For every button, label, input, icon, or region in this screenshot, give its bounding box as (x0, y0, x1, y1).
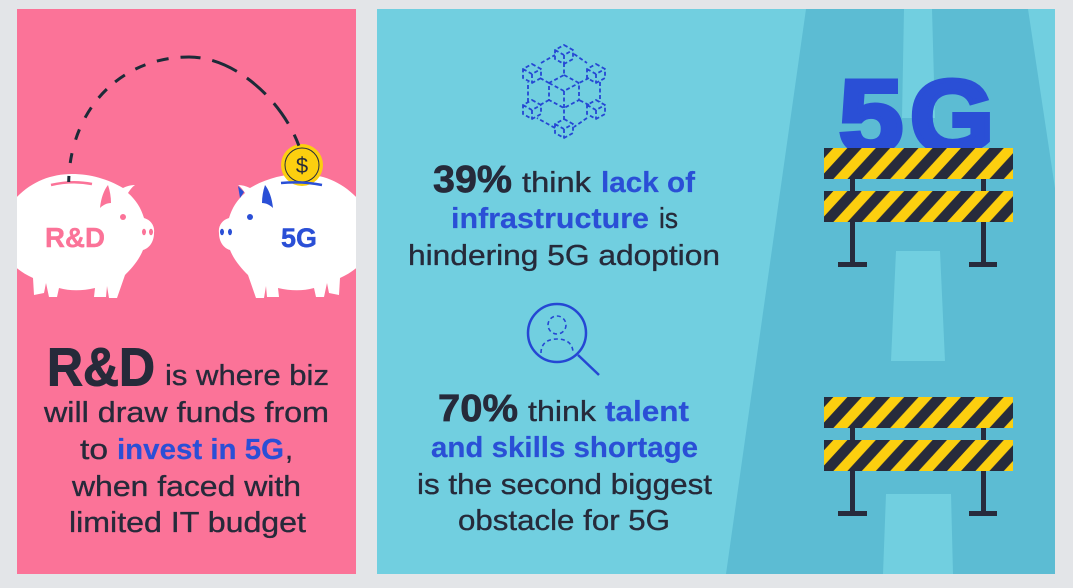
text block: talent statistic: obstacle for 5G (458, 505, 670, 537)
text block: talent statistic: talent (605, 396, 689, 428)
arrow: dashed coin path between piggy banks (69, 57, 299, 182)
text block: R&D statement: invest in 5G (117, 434, 284, 466)
icon: bottom road barrier (824, 397, 1013, 516)
text block: R&D statement: is where biz (165, 360, 329, 392)
text block: R&D statement: will draw funds from (43, 397, 329, 429)
text block: talent statistic: think (528, 396, 597, 428)
text block: R&D statement: to (80, 434, 108, 466)
icon: top road barrier (824, 148, 1013, 267)
icon: gold coin (281, 144, 323, 186)
heading: large 5G: G (910, 59, 994, 174)
text block: R&D statement: limited IT budget (69, 507, 306, 539)
text block: infrastructure statistic: hindering 5G adoption (408, 240, 720, 272)
icon: R&D piggy bank (10, 174, 154, 298)
text block: infrastructure statistic: is (659, 203, 678, 235)
text block: R&D statement: R&D (47, 338, 155, 398)
text block: talent statistic: and skills shortage (431, 432, 698, 464)
icon: gold coin: $ (296, 153, 308, 178)
icon: R&D piggy bank: R&D (45, 222, 105, 253)
icon: magnifier over person (528, 304, 599, 375)
text block: R&D statement (43, 338, 329, 539)
text block: talent statistic: is the second biggest (417, 469, 712, 501)
panel: 5G obstacles (377, 9, 1056, 574)
heading: large 5G (839, 78, 990, 148)
text block: infrastructure statistic: lack of (601, 167, 695, 199)
panel: R&D funding (10, 9, 363, 574)
text block: infrastructure statistic: infrastructure (451, 203, 649, 235)
text block: R&D statement: , (285, 434, 293, 466)
icon: 5G piggy bank (219, 144, 363, 298)
text block: infrastructure statistic: think (522, 167, 592, 199)
text block: talent statistic: 70% (438, 388, 518, 430)
icon: blockchain network (523, 45, 605, 138)
road background (726, 9, 1056, 574)
text block: infrastructure statistic (408, 159, 720, 272)
icon: 5G piggy bank: 5G (281, 223, 317, 253)
text block: R&D statement: when faced with (71, 471, 301, 503)
heading: large 5G: 5 (839, 59, 903, 174)
text block: infrastructure statistic: 39% (433, 159, 512, 201)
text block: talent statistic (417, 388, 712, 537)
